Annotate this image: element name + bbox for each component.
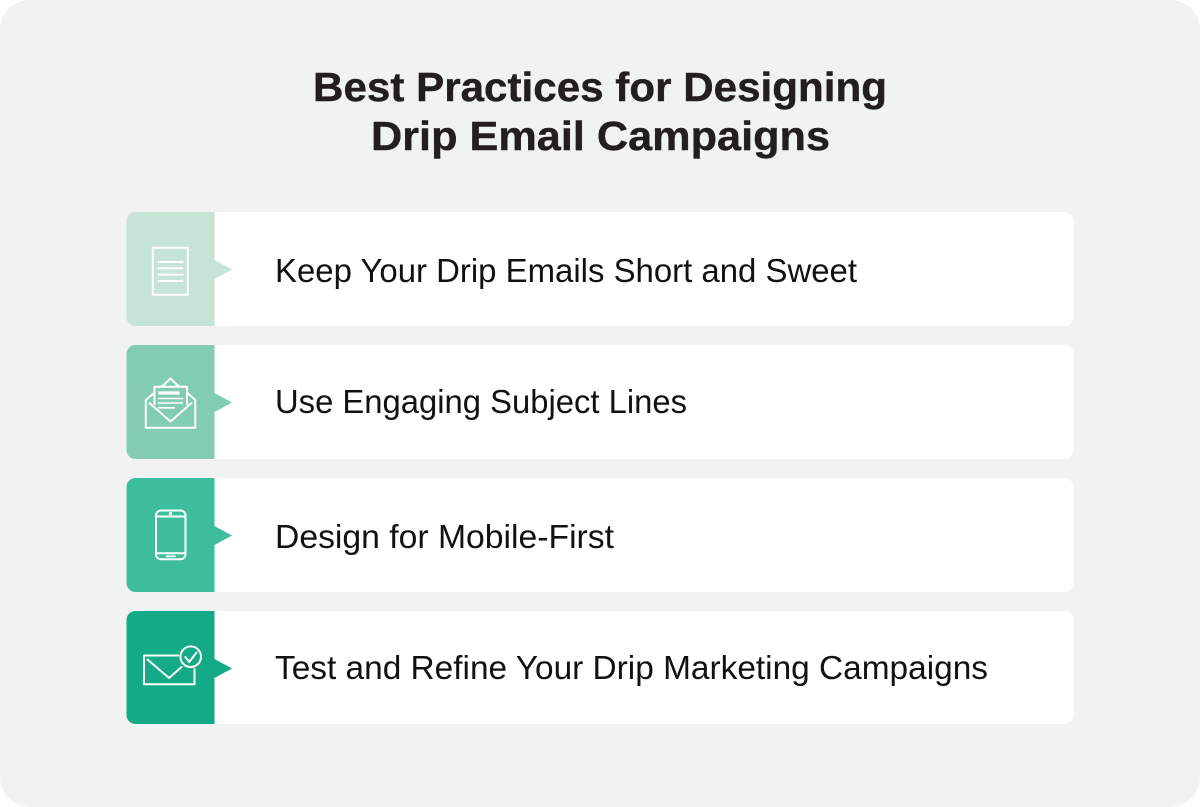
row 4: test and refine bbox=[126, 611, 1074, 724]
label: test and refine: Test and Refine Your Drip Marketing Campaigns bbox=[275, 649, 988, 686]
title bbox=[313, 64, 887, 159]
label: mobile first: Design for Mobile-First bbox=[275, 518, 614, 555]
row 3: mobile first bbox=[126, 478, 1074, 592]
icon: envelope with check mark bbox=[144, 646, 201, 684]
label: subject lines: Use Engaging Subject Lines bbox=[275, 383, 687, 420]
label: keep emails short: Keep Your Drip Emails Short and Sweet bbox=[275, 252, 857, 289]
icon: open envelope with letter bbox=[146, 378, 195, 428]
row 2: subject lines bbox=[126, 345, 1074, 459]
title: Drip Email Campaigns bbox=[371, 113, 830, 159]
icon: smartphone bbox=[156, 510, 186, 559]
icon: document bbox=[153, 248, 188, 295]
row 1: keep emails short bbox=[126, 212, 1074, 326]
title: Best Practices for Designing bbox=[313, 64, 887, 110]
